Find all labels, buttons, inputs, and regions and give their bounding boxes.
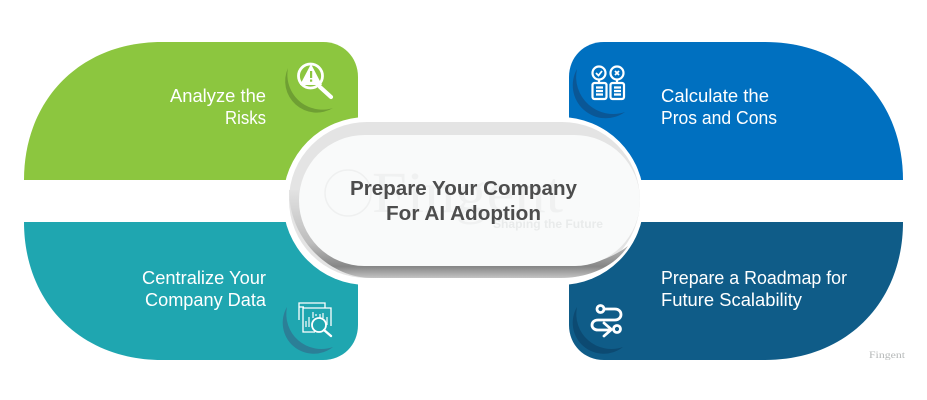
panel: prepare a roadmap: Future Scalability (661, 290, 802, 310)
panel: centralize company data: Company Data (145, 290, 267, 310)
icon: risk magnifier (285, 64, 333, 113)
title (350, 177, 578, 225)
icon: roadmap path (573, 306, 623, 354)
panel: centralize company data (24, 222, 358, 360)
panel: analyze the risks: Risks (225, 108, 266, 128)
watermark: fingent logo (325, 160, 603, 231)
label: calculate the pros and cons: Calculate the (661, 86, 769, 106)
panel: prepare a roadmap (569, 222, 903, 360)
title: For AI Adoption (386, 202, 541, 225)
panel: analyze the risks (24, 42, 358, 180)
panel: calculate pros and cons: Pros and Cons (661, 108, 777, 128)
watermark: fingent logo: Fingent (372, 160, 563, 225)
label: prepare a roadmap for future scalability: Prepare a Roadmap for (661, 268, 847, 288)
panel: central pill (283, 117, 644, 285)
watermark: fingent small: Fingent (869, 351, 905, 361)
watermark: fingent logo: Shaping the Future (493, 217, 603, 231)
label: centralize your company data: Centralize Your (142, 268, 266, 288)
icon: data dashboard magnifier (283, 303, 333, 354)
icon: pros and cons lists (573, 66, 625, 118)
title: Prepare Your Company (350, 177, 578, 200)
panel: calculate pros and cons (569, 42, 903, 180)
label: analyze the risks: Analyze the (170, 86, 266, 106)
